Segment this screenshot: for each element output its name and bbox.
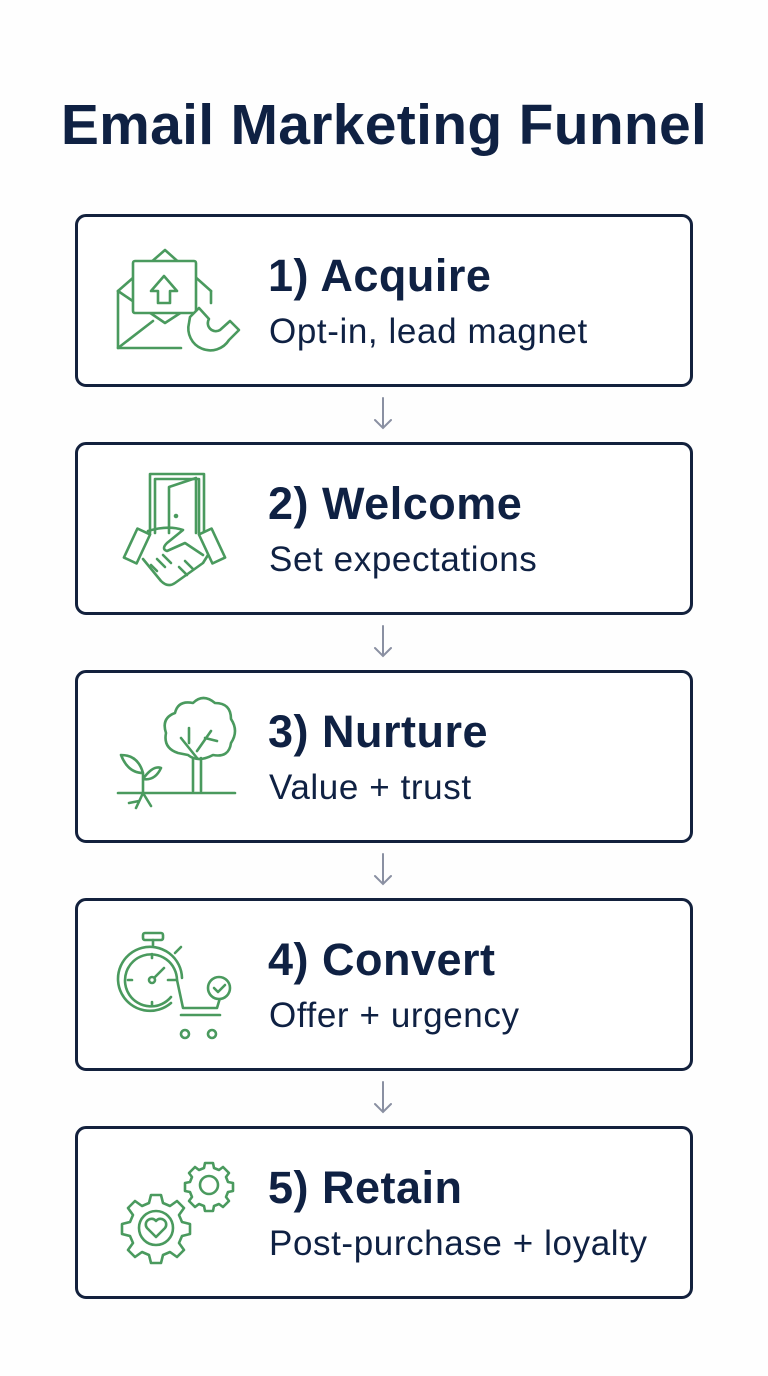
heading: 1) Acquire	[268, 250, 491, 301]
subtitle: Opt-in, lead magnet	[269, 312, 588, 351]
heading: 3) Nurture	[268, 706, 488, 757]
icon: envelope with magnet	[116, 248, 240, 352]
panel: welcome	[75, 442, 693, 615]
subtitle: Value + trust	[269, 768, 472, 807]
subtitle: Post-purchase + loyalty	[269, 1224, 648, 1263]
icon: stopwatch and cart	[116, 932, 232, 1040]
panel: acquire	[75, 214, 693, 387]
title: Email Marketing Funnel	[61, 93, 707, 157]
arrow	[374, 397, 392, 430]
heading: 4) Convert	[268, 934, 496, 985]
panel: retain	[75, 1126, 693, 1299]
panel: nurture	[75, 670, 693, 843]
icon: gears with heart	[120, 1162, 234, 1264]
arrow	[374, 625, 392, 658]
subtitle: Set expectations	[269, 540, 537, 579]
heading: 2) Welcome	[268, 478, 522, 529]
icon: sprout and tree	[116, 696, 236, 810]
arrow	[374, 853, 392, 886]
subtitle: Offer + urgency	[269, 996, 520, 1035]
heading: 5) Retain	[268, 1162, 463, 1213]
panel: convert	[75, 898, 693, 1071]
icon: door and handshake	[122, 472, 226, 586]
arrow	[374, 1081, 392, 1114]
